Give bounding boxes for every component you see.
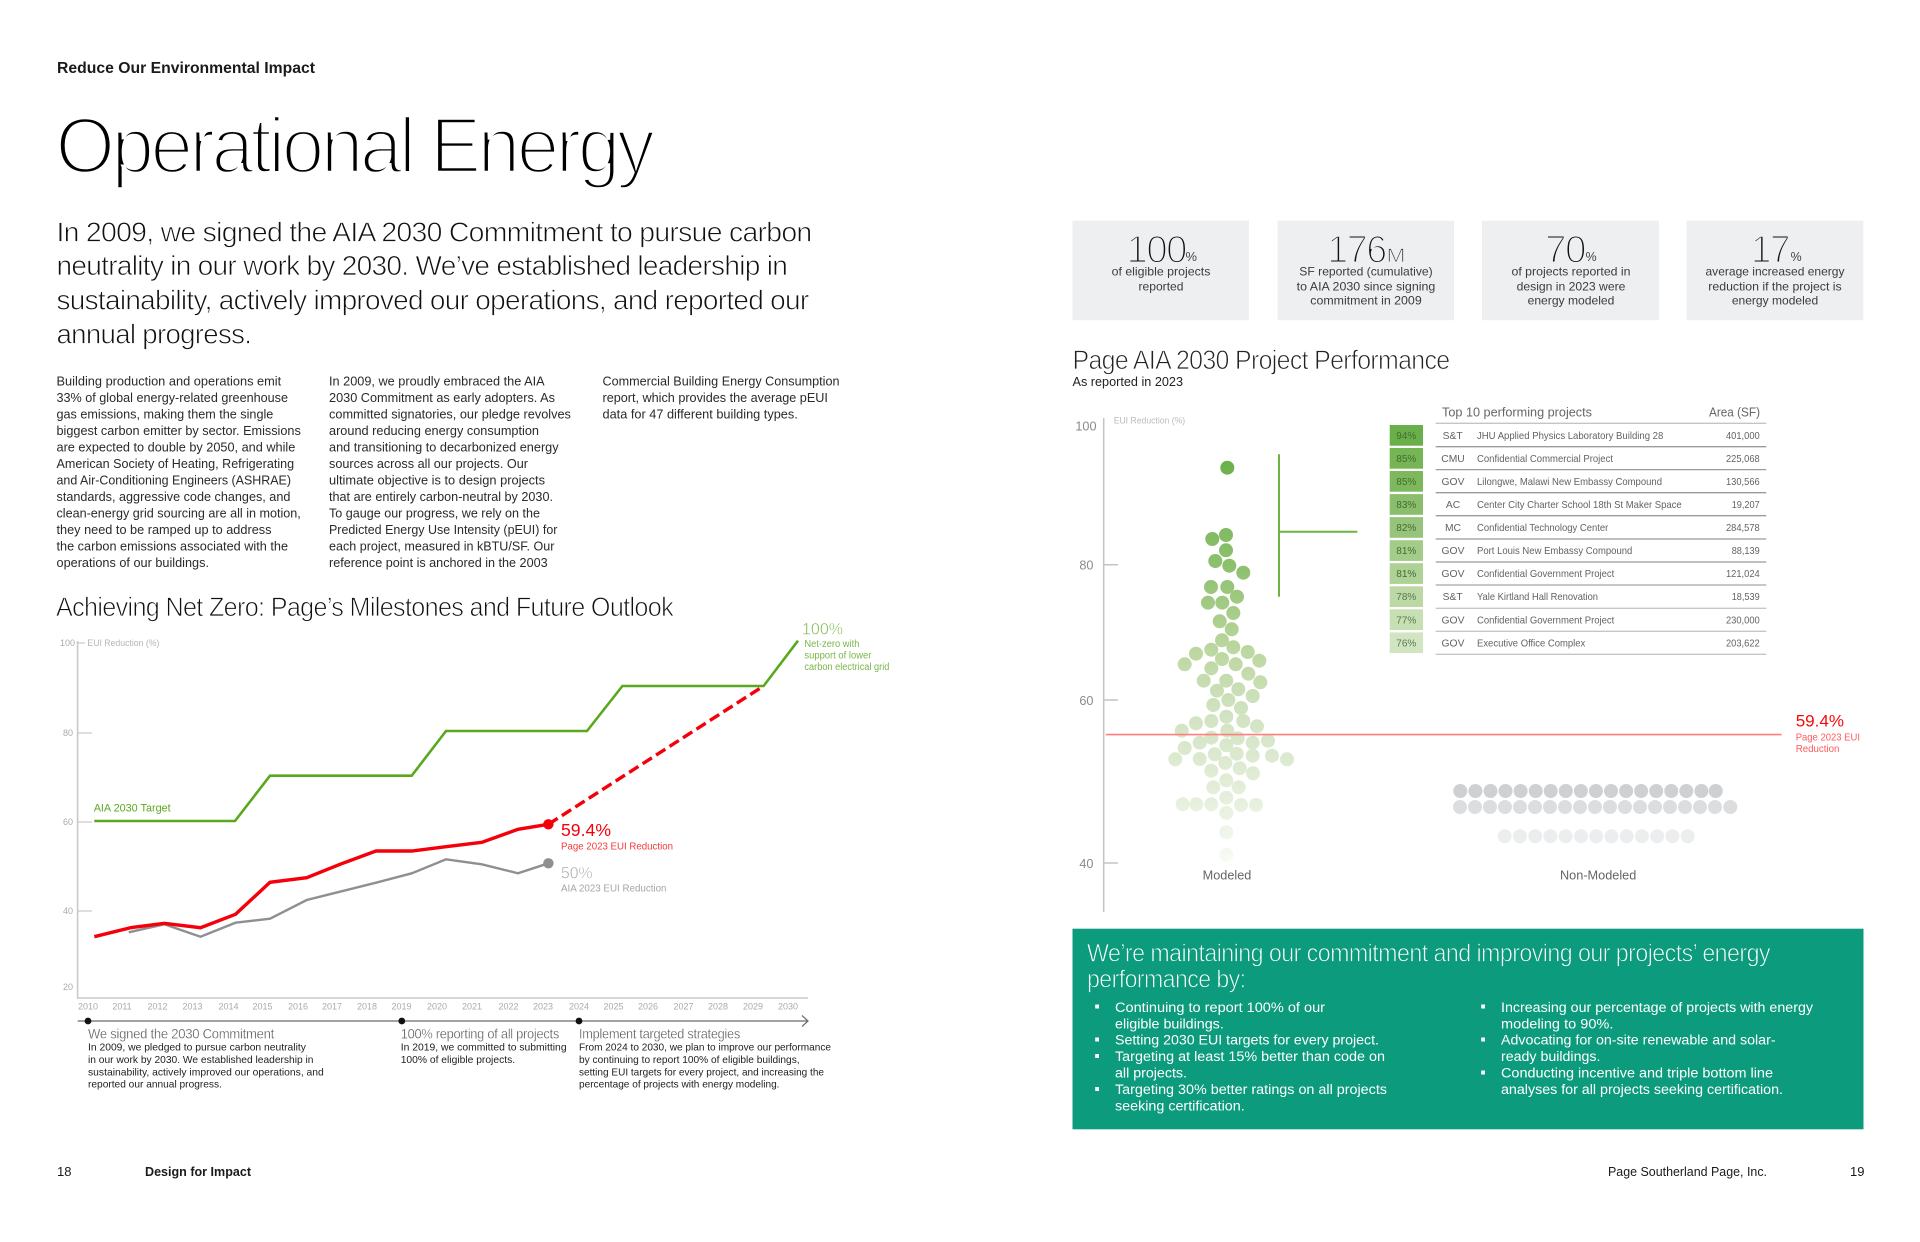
stat card: 100 percent: % [1186, 249, 1197, 264]
bullets right: analyses for all projects seeking certification. [1501, 1082, 1783, 1098]
panel: commitment actions [1072, 929, 1864, 1129]
bracket to top projects [1279, 454, 1357, 597]
bullets right: Advocating for on-site renewable and solar- [1501, 1033, 1776, 1049]
reduction reference line [1106, 734, 1782, 736]
stat card: 176M: M [1386, 246, 1406, 267]
body text column 1: biggest carbon emitter by sector. Emissions [56, 423, 301, 438]
modeled projects dots [1168, 461, 1294, 862]
percent chips: 76% [1396, 639, 1416, 650]
body text column 1 [56, 374, 301, 570]
body text column 2: and transitioning to decarbonized energy [329, 440, 559, 455]
section label: Reduce Our Environmental Impact [57, 60, 315, 77]
Page EUI reduction line [94, 824, 548, 937]
callout: 59.4 percent [561, 820, 673, 852]
body text column 1: operations of our buildings. [56, 555, 209, 570]
callout: 100 percent: Net-zero with [804, 639, 859, 650]
timeline dots [85, 1018, 582, 1024]
x axis years: 2011 [112, 1002, 132, 1012]
x axis years: 2018 [357, 1002, 377, 1012]
projected dashed line [548, 688, 760, 824]
stat card: 176M: SF reported (cumulative) [1299, 265, 1433, 279]
milestone 2: In 2019, we committed to submitting [401, 1041, 567, 1053]
heading: project performance [1072, 345, 1450, 389]
body text column 1: the carbon emissions associated with the [56, 539, 288, 554]
table rows: 203,622 [1726, 639, 1760, 650]
milestone 2 [401, 1026, 567, 1066]
stat card: 70 percent: energy modeled [1528, 294, 1614, 308]
stat card: 70 percent: design in 2023 were [1517, 279, 1626, 293]
stat card: 17 percent: average increased energy [1706, 265, 1844, 279]
body text column 1: standards, aggressive code changes, and [56, 489, 290, 504]
table rows [1441, 431, 1760, 650]
AIA 2030 target line [94, 641, 798, 821]
bullets left: seeking certification. [1115, 1098, 1245, 1114]
stat card: 100 percent: reported [1138, 279, 1184, 293]
percent chips: 78% [1396, 592, 1416, 603]
table rows: AC [1446, 500, 1461, 511]
title: Operational Energy [56, 100, 655, 190]
body text column 1: American Society of Heating, Refrigerating [56, 456, 294, 471]
x axis years: 2020 [427, 1002, 447, 1012]
x axis years: 2023 [533, 1002, 553, 1012]
category labels [1203, 868, 1636, 882]
callout: 100 percent: support of lower [804, 650, 872, 662]
callout: 50 percent [561, 864, 667, 894]
table rows: MC [1445, 523, 1462, 534]
body text column 1: and Air-Conditioning Engineers (ASHRAE) [56, 473, 291, 488]
stat card: 17 percent: energy modeled [1732, 294, 1818, 308]
table rows: 230,000 [1726, 615, 1760, 626]
table rows: GOV [1442, 546, 1465, 557]
body text column 2 [329, 374, 571, 570]
table rows: GOV [1442, 569, 1465, 580]
heading: project performance: As reported in 2023 [1072, 375, 1183, 389]
table: top 10 performing projects [1390, 406, 1766, 654]
milestone 3: From 2024 to 2030, we plan to improve our performance [579, 1041, 831, 1053]
panel heading [1087, 940, 1771, 994]
x axis years: 2016 [288, 1002, 308, 1012]
milestone 1: reported our annual progress. [88, 1078, 222, 1090]
x axis years: 2028 [708, 1002, 728, 1012]
stat card: 176M: 176 [1327, 229, 1386, 272]
bullets right: modeling to 90%. [1501, 1016, 1613, 1032]
body text column 2: Predicted Energy Use Intensity (pEUI) for [329, 522, 558, 537]
y axis labels: 100 [60, 638, 75, 648]
table header [1442, 406, 1760, 420]
callout: 59.4 percent: 59.4% [561, 820, 611, 840]
milestone 1: In 2009, we pledged to pursue carbon neutrality [88, 1041, 307, 1053]
table rows: S&T [1443, 592, 1463, 603]
percent chips: 81% [1396, 569, 1416, 580]
x axis years [78, 1002, 798, 1012]
AIA average end dot [543, 858, 554, 868]
table rows: 401,000 [1726, 431, 1760, 442]
Page end dot [543, 819, 554, 830]
heading: project performance: Page AIA 2030 Project Performance [1072, 345, 1450, 375]
body text column 1: 33% of global energy-related greenhouse [56, 390, 288, 405]
body text column 1: clean-energy grid sourcing are all in motion, [56, 506, 301, 521]
table rows: JHU Applied Physics Laboratory Building 28 [1477, 431, 1664, 442]
stat card: 70 percent [1482, 221, 1659, 320]
panel heading: We’re maintaining our commitment and improving our projects’ energy [1087, 940, 1771, 968]
dot plot y labels: 80 [1079, 558, 1094, 572]
percent chips: 85% [1396, 477, 1416, 488]
milestone 3: Implement targeted strategies [579, 1026, 740, 1042]
x axis years: 2019 [391, 1002, 412, 1012]
stat card: 17 percent [1687, 221, 1863, 320]
footer left: 18 [57, 1164, 71, 1179]
x axis years: 2010 [78, 1002, 98, 1012]
body text column 2: To gauge our progress, we rely on the [329, 506, 540, 521]
callout: 100 percent: carbon electrical grid [804, 662, 889, 673]
x axis years: 2015 [252, 1002, 273, 1012]
table rows: Center City Charter School 18th St Maker Space [1477, 500, 1682, 511]
category labels: Non-Modeled [1560, 868, 1636, 882]
callout: 50 percent: AIA 2023 EUI Reduction [561, 882, 667, 894]
percent chips [1390, 425, 1423, 653]
x axis years: 2022 [498, 1002, 519, 1012]
table rows: 121,024 [1726, 569, 1760, 580]
x axis years: 2026 [638, 1002, 658, 1012]
callout: 100 percent: 100% [802, 620, 843, 638]
stat card: 17 percent: reduction if the project is [1708, 279, 1842, 293]
footer right [1608, 1164, 1864, 1179]
percent chips: 82% [1396, 523, 1416, 534]
body text column 2: each project, measured in kBTU/SF. Our [329, 539, 555, 554]
table rows: 18,539 [1732, 592, 1760, 603]
dot plot y labels: 60 [1079, 694, 1094, 708]
milestone 3: percentage of projects with energy modeling. [579, 1078, 780, 1090]
body text column 3: Commercial Building Energy Consumption [602, 374, 840, 389]
milestone 2: 100% of eligible projects. [401, 1054, 515, 1066]
table rows: CMU [1441, 454, 1465, 465]
stat card: 100 percent: of eligible projects [1112, 265, 1210, 279]
callout: 100 percent [802, 620, 889, 673]
dot plot y labels: 40 [1079, 857, 1094, 871]
body text column 3: data for 47 different building types. [602, 407, 798, 422]
body text column 1: they need to be ramped up to address [56, 522, 272, 537]
stat card: 70 percent: of projects reported in [1512, 265, 1630, 279]
stat card: 17 percent: % [1791, 249, 1802, 264]
x axis years: 2021 [462, 1002, 482, 1012]
table rows: S&T [1443, 431, 1463, 442]
body text column 2: committed signatories, our pledge revolves [329, 407, 571, 422]
bullets left: eligible buildings. [1115, 1016, 1224, 1032]
dot plot y labels [1075, 420, 1096, 871]
milestone 1: in our work by 2030. We established leadership in [88, 1054, 314, 1066]
bullets left: Continuing to report 100% of our [1115, 1000, 1325, 1016]
body text column 2: 2030 Commitment as early adopters. As [329, 390, 555, 405]
body text column 3 [602, 374, 840, 422]
table rows: Confidential Government Project [1477, 615, 1614, 626]
bullets left: Setting 2030 EUI targets for every project. [1115, 1033, 1379, 1049]
footer right: Page Southerland Page, Inc. [1608, 1164, 1767, 1179]
non-modeled projects dots row 1 [1453, 784, 1723, 798]
table rows: Executive Office Complex [1477, 639, 1586, 650]
milestone 2: 100% reporting of all projects [401, 1026, 559, 1042]
table rows: 284,578 [1726, 523, 1760, 534]
body text column 2: sources across all our projects. Our [329, 456, 529, 471]
body text column 2: reference point is anchored in the 2003 [329, 555, 548, 570]
table rows: Lilongwe, Malawi New Embassy Compound [1477, 477, 1662, 488]
table rows: GOV [1442, 477, 1465, 488]
bullets right [1481, 1000, 1814, 1098]
bullets right: Conducting incentive and triple bottom line [1501, 1066, 1773, 1082]
heading: achieving net zero: Achieving Net Zero: Page’s Milestones and Future Outlook [56, 592, 674, 622]
table rows: GOV [1442, 615, 1465, 626]
table rows: Confidential Technology Center [1477, 523, 1609, 534]
intro paragraph: neutrality in our work by 2030. We’ve established leadership in [56, 250, 787, 281]
stat card: 100 percent: 100 [1126, 229, 1186, 272]
body text column 1: are expected to double by 2050, and while [56, 440, 295, 455]
x axis years: 2029 [743, 1002, 763, 1012]
dot plot axes [1104, 418, 1118, 912]
x axis years: 2030 [778, 1002, 798, 1012]
milestone 3: setting EUI targets for every project, and increasing the [579, 1066, 824, 1078]
table rows: 130,566 [1726, 477, 1760, 488]
bullets left: all projects. [1115, 1066, 1187, 1082]
stat card: 100 percent [1072, 221, 1249, 320]
dot plot chart [1075, 416, 1860, 912]
body text column 2: that are entirely carbon-neutral by 2030. [329, 489, 553, 504]
callout: 59.4 percent reduction [1796, 712, 1860, 755]
non-modeled projects dots row 2 [1453, 800, 1737, 814]
bullets right: ready buildings. [1501, 1049, 1600, 1065]
chart axes [78, 641, 808, 998]
stat card: 176M: commitment in 2009 [1310, 294, 1422, 308]
percent chips: 77% [1396, 615, 1416, 626]
table rows: 19,207 [1732, 500, 1760, 511]
y axis labels: 20 [63, 982, 73, 992]
intro paragraph: In 2009, we signed the AIA 2030 Commitment to pursue carbon [56, 216, 812, 247]
body text column 2: ultimate objective is to design projects [329, 473, 545, 488]
stat card: 70 percent: 70 [1545, 229, 1585, 272]
table rows: GOV [1442, 639, 1465, 650]
axis title: EUI Reduction (%) [87, 638, 159, 648]
table rows: 225,068 [1726, 454, 1760, 465]
body text column 3: report, which provides the average pEUI [602, 390, 828, 405]
AIA average line [129, 859, 548, 937]
x axis years: 2013 [182, 1002, 203, 1012]
percent chips: 85% [1396, 454, 1416, 465]
callout: 59.4 percent reduction: 59.4% [1796, 712, 1844, 730]
y axis labels: 40 [63, 906, 73, 916]
dot plot axis title: EUI Reduction (%) [1114, 416, 1185, 426]
category labels: Modeled [1203, 868, 1251, 882]
stat card: 70 percent: % [1586, 249, 1597, 264]
milestone 1: We signed the 2030 Commitment [88, 1026, 274, 1042]
non-modeled projects dots row 3 [1498, 829, 1695, 843]
intro paragraph: sustainability, actively improved our operations, and reported our [56, 285, 809, 316]
milestone 1 [88, 1026, 324, 1090]
callout: 50 percent: 50% [561, 864, 593, 882]
footer left [57, 1164, 252, 1179]
percent chips: 81% [1396, 546, 1416, 557]
percent chips: 94% [1396, 431, 1416, 442]
bullets left: Targeting 30% better ratings on all projects [1115, 1082, 1387, 1098]
table rules [1436, 423, 1766, 654]
milestone 1: sustainability, actively improved our operations, and [88, 1066, 324, 1078]
milestone 3: by continuing to report 100% of eligible buildings, [579, 1054, 800, 1066]
panel heading: performance by: [1087, 966, 1246, 994]
bullets left [1095, 1000, 1387, 1114]
percent chips: 83% [1396, 500, 1416, 511]
intro paragraph [56, 216, 812, 350]
bullets right: Increasing our percentage of projects with energy [1501, 1000, 1814, 1016]
stat card: 176M: to AIA 2030 since signing [1297, 279, 1435, 293]
x axis years: 2027 [673, 1002, 694, 1012]
body text column 2: around reducing energy consumption [329, 423, 539, 438]
timeline arrow [78, 1016, 808, 1026]
x axis years: 2012 [147, 1002, 168, 1012]
milestone 3 [579, 1026, 831, 1090]
y axis labels [60, 638, 75, 992]
callout: 59.4 percent reduction: Reduction [1796, 743, 1840, 755]
bullets left: Targeting at least 15% better than code on [1115, 1049, 1385, 1065]
x axis years: 2017 [322, 1002, 342, 1012]
table rows: Port Louis New Embassy Compound [1477, 546, 1633, 557]
timeline [78, 1016, 831, 1090]
stat card: 176M [1278, 221, 1454, 320]
body text column 1: Building production and operations emit [56, 374, 282, 389]
footer right: 19 [1850, 1164, 1864, 1179]
x axis years: 2024 [569, 1002, 589, 1012]
table rows: Yale Kirtland Hall Renovation [1477, 592, 1598, 603]
table rows: Confidential Government Project [1477, 569, 1614, 580]
label: AIA 2030 target: AIA 2030 Target [94, 802, 171, 814]
x axis years: 2025 [603, 1002, 624, 1012]
y axis labels: 80 [63, 728, 73, 738]
intro paragraph: annual progress. [56, 319, 251, 350]
table rows: Confidential Commercial Project [1477, 454, 1613, 465]
body text column 2: In 2009, we proudly embraced the AIA [329, 374, 545, 389]
table rows: 88,139 [1732, 546, 1760, 557]
line chart: milestones and outlook [60, 620, 889, 1012]
body text column 1: gas emissions, making them the single [56, 407, 273, 422]
callout: 59.4 percent reduction: Page 2023 EUI [1796, 732, 1860, 744]
callout: 59.4 percent: Page 2023 EUI Reduction [561, 840, 673, 852]
table header: Top 10 performing projects [1442, 406, 1592, 420]
footer left: Design for Impact [145, 1164, 252, 1179]
y axis labels: 60 [63, 817, 73, 827]
stat card: 17 percent: 17 [1751, 229, 1789, 272]
x axis years: 2014 [218, 1002, 239, 1012]
dot plot y labels: 100 [1075, 420, 1096, 434]
table header: Area (SF) [1709, 406, 1760, 420]
